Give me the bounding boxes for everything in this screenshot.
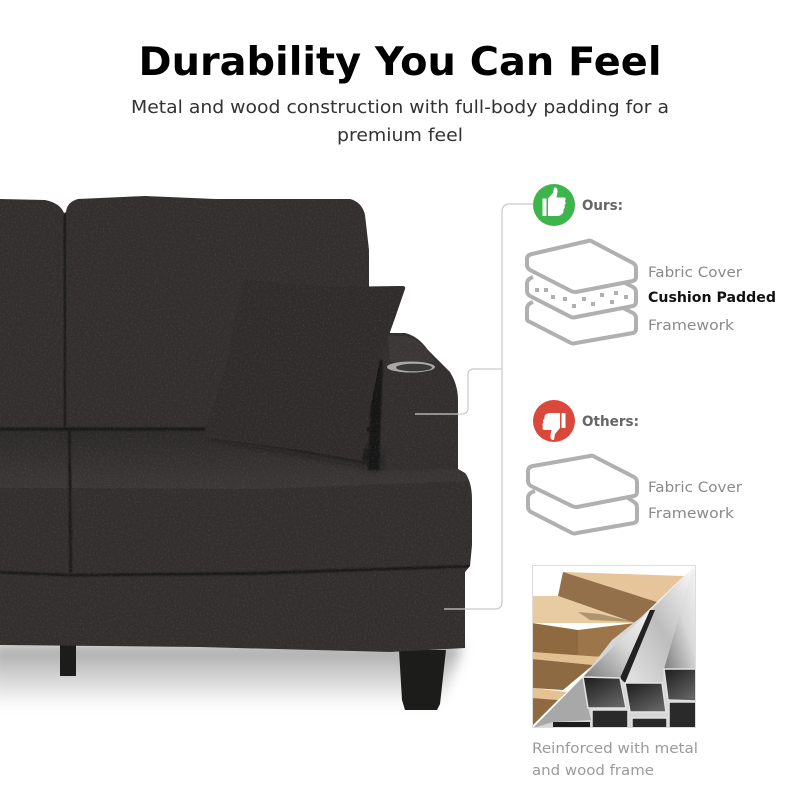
layer labels: ours: Framework [648,318,735,334]
seat top surface [70,430,468,489]
layer labels: others [648,480,742,522]
photo caption [532,741,698,779]
panel: others [528,400,742,534]
subtitle: Metal and wood construction with full-body padding for a [131,97,669,118]
sofa legs [60,644,446,710]
heading: ours: Ours: [582,198,623,214]
subtitle: premium feel [337,125,463,146]
layer labels: others: Framework [648,506,735,522]
throw pillow [203,280,405,461]
panel: ours [527,184,776,344]
metal tubes [533,568,696,728]
layer labels: ours: Cushion Padded [648,290,776,306]
sofa photo [0,196,472,710]
photo caption: and wood frame [532,763,654,779]
cup holder [387,362,435,372]
icon: two layer cushion [528,456,637,534]
subtitle [131,97,669,146]
icon: three layer cushion [527,241,636,344]
seams and shading [0,214,470,576]
icon: thumbs up [533,184,575,226]
layer labels: ours [648,265,776,334]
photo caption: Reinforced with metal [532,741,698,757]
heading: others: Others: [582,414,639,430]
layer labels: others: Fabric Cover [648,480,742,496]
floor shadow [0,644,462,708]
sofa body [0,196,472,652]
icon: thumbs down [533,400,575,442]
title: Durability You Can Feel [138,40,662,85]
layer labels: ours: Fabric Cover [648,265,742,281]
fabric texture [0,196,472,652]
connector lines [415,204,533,609]
wood boards [532,572,684,726]
photo: wood and metal frame [532,565,696,728]
